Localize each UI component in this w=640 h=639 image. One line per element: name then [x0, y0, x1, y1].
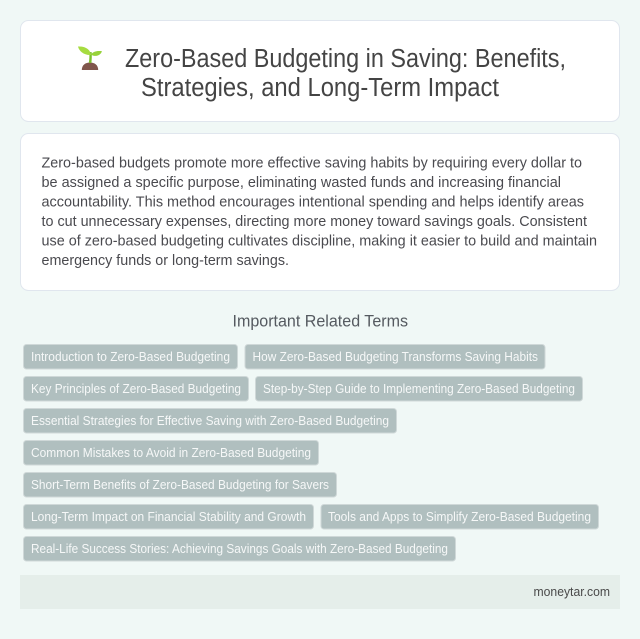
- chip: common mistakes: [24, 440, 318, 465]
- icon: sprout: [78, 46, 102, 70]
- chip: success stories: [24, 536, 456, 561]
- summary paragraph: emergency funds or long-term savings.: [42, 252, 289, 269]
- chip: introduction: Introduction to Zero-Based Budgeting: [31, 349, 230, 364]
- chip: short-term benefits: Short-Term Benefits of Zero-Based Budgeting for Savers: [31, 477, 329, 492]
- summary paragraph: accountability. This method encourages intentional spending and helps identify areas: [42, 194, 584, 210]
- title: Strategies, and Long-Term Impact: [141, 74, 499, 102]
- chip: introduction: [24, 344, 238, 369]
- summary paragraph: use of zero-based budgeting cultivates discipline, making it easier to build and maintain: [42, 232, 597, 250]
- chip: key principles: [24, 376, 248, 401]
- title: Zero-Based Budgeting in Saving: Benefits,: [125, 45, 566, 73]
- chip: tools and apps: [321, 504, 598, 529]
- chip: short-term benefits: [24, 472, 336, 497]
- chip: essential strategies: [24, 408, 396, 433]
- chip: saving habits: How Zero-Based Budgeting Transforms Saving Habits: [252, 349, 538, 364]
- chip: tools and apps: Tools and Apps to Simplify Zero-Based Budgeting: [328, 509, 591, 524]
- chip: essential strategies: Essential Strategies for Effective Saving with Zero-Based Budgeting: [31, 413, 389, 428]
- chip: success stories: Real-Life Success Stories: Achieving Savings Goals with Zero-Based Budgeting: [31, 541, 448, 556]
- footer: [20, 575, 620, 609]
- chip: long-term impact: Long-Term Impact on Financial Stability and Growth: [31, 509, 306, 524]
- chip: saving habits: [245, 344, 545, 369]
- chip: key principles: Key Principles of Zero-Based Budgeting: [31, 381, 241, 396]
- title: [125, 45, 566, 102]
- panel: related term chips: [24, 344, 598, 561]
- chip: step-by-step guide: [256, 376, 582, 401]
- chip: long-term impact: [24, 504, 314, 529]
- chip: step-by-step guide: Step-by-Step Guide to Implementing Zero-Based Budgeting: [263, 381, 575, 396]
- summary paragraph: be assigned a specific purpose, eliminating wasted funds and increasing financial: [42, 174, 561, 191]
- chip: common mistakes: Common Mistakes to Avoid in Zero-Based Budgeting: [31, 445, 311, 460]
- summary paragraph: to cut unnecessary expenses, directing more money toward savings goals. Consistent: [42, 213, 588, 230]
- footer source text: moneytar.com: [534, 584, 610, 599]
- panel: summary text card: [20, 134, 620, 290]
- summary paragraph: Zero-based budgets promote more effective saving habits by requiring every dollar to: [42, 154, 582, 172]
- panel: title card: [20, 20, 620, 122]
- heading: related terms: Important Related Terms: [232, 312, 408, 330]
- summary paragraph: [42, 154, 597, 269]
